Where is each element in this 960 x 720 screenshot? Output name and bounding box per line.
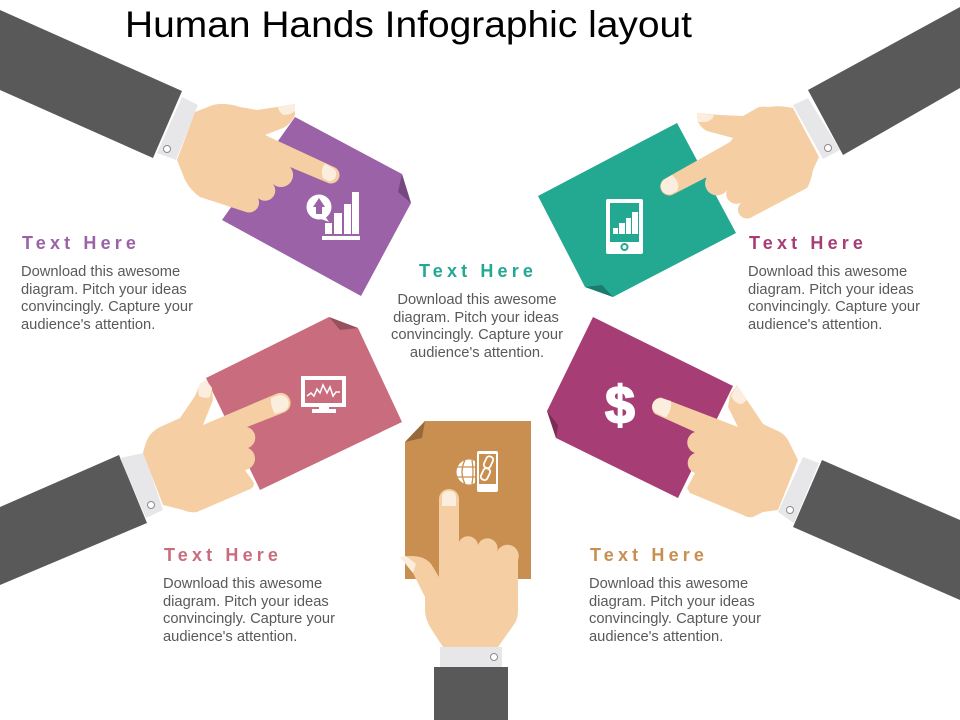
body: convincingly. Capture your — [391, 327, 563, 343]
teal cuff — [793, 98, 840, 159]
body: diagram. Pitch your ideas — [163, 594, 329, 610]
icon: upload bubble and bar chart — [306, 192, 360, 240]
purple sleeve — [0, 10, 182, 158]
heading: Text Here — [590, 545, 708, 565]
icon: monitor with pulse — [301, 376, 346, 413]
body: audience's attention. — [748, 317, 882, 333]
body: Download this awesome — [397, 292, 557, 308]
heading: Text Here — [749, 233, 867, 253]
title: Human Hands Infographic layout — [125, 4, 693, 45]
body: audience's attention. — [21, 317, 155, 333]
magenta card — [547, 317, 733, 498]
body: convincingly. Capture your — [163, 611, 335, 627]
body: diagram. Pitch your ideas — [21, 282, 187, 298]
body: convincingly. Capture your — [589, 611, 761, 627]
body: Download this awesome — [163, 576, 322, 592]
icon: phone with bars — [606, 199, 643, 254]
body: diagram. Pitch your ideas — [393, 310, 559, 326]
gold card — [405, 421, 531, 579]
rose cuff — [120, 453, 163, 518]
purple hand — [177, 104, 340, 212]
rose sleeve — [0, 455, 147, 585]
gold hand — [400, 489, 519, 647]
body: diagram. Pitch your ideas — [748, 282, 914, 298]
body: audience's attention. — [163, 629, 297, 645]
magenta sleeve — [793, 460, 960, 600]
text block: lower left — [163, 545, 335, 645]
body: convincingly. Capture your — [748, 299, 920, 315]
gold sleeve — [434, 667, 508, 720]
body: Download this awesome — [589, 576, 748, 592]
body: audience's attention. — [410, 345, 544, 361]
body: Download this awesome — [748, 264, 907, 280]
purple card — [222, 117, 411, 296]
teal sleeve — [808, 7, 960, 155]
panel: rose hand and card — [0, 317, 402, 585]
body: Download this awesome — [21, 264, 180, 280]
text block: left top — [21, 233, 193, 333]
teal hand — [660, 106, 819, 219]
magenta hand — [652, 385, 798, 517]
panel: gold hand and card — [400, 421, 531, 720]
icon: globe and linked phone — [456, 449, 499, 493]
heading: Text Here — [164, 545, 282, 565]
body: convincingly. Capture your — [21, 299, 193, 315]
magenta cuff — [778, 457, 819, 523]
purple cuff — [157, 97, 198, 160]
heading: Text Here — [22, 233, 140, 253]
teal card — [538, 123, 736, 297]
body: diagram. Pitch your ideas — [589, 594, 755, 610]
body: audience's attention. — [589, 629, 723, 645]
rose card — [206, 317, 402, 490]
panel: magenta hand and card — [547, 317, 960, 600]
text block: right top — [748, 233, 920, 333]
heading: Text Here — [419, 261, 537, 281]
panel: teal hand and card — [538, 7, 960, 297]
gold cuff — [440, 647, 502, 667]
icon: dollar sign: $ — [605, 376, 635, 435]
text block: center — [391, 261, 563, 361]
rose hand — [143, 380, 291, 512]
text block: lower right — [589, 545, 761, 645]
panel: purple hand and card — [0, 10, 411, 296]
